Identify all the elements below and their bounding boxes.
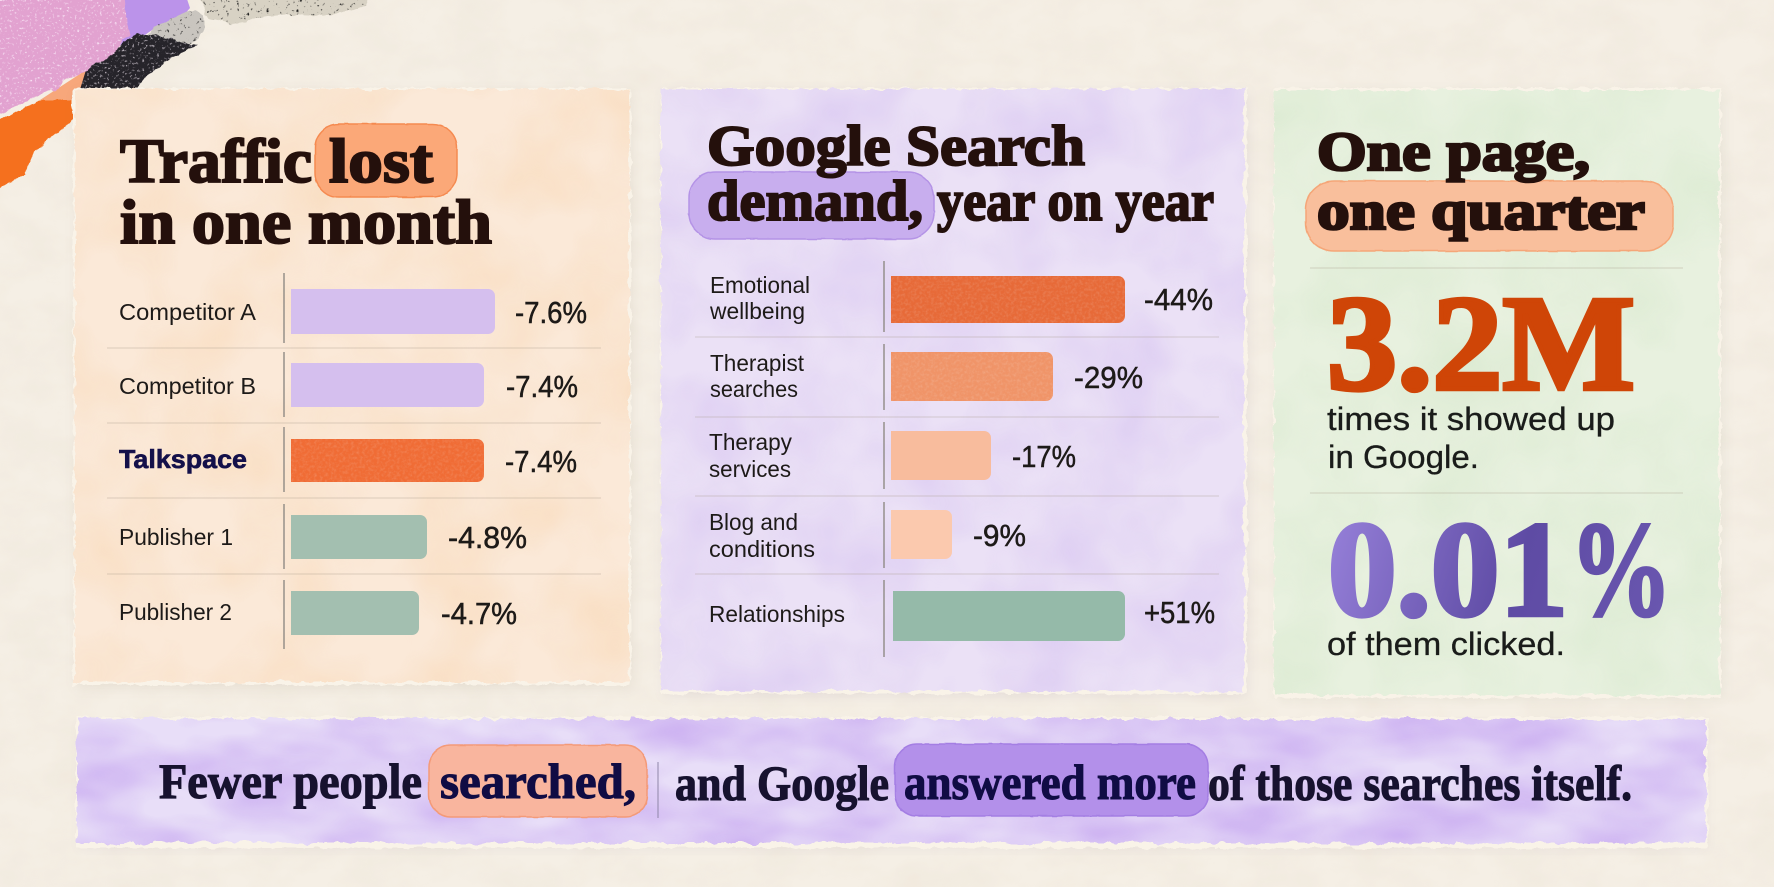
row: Publisher 1: -4.8% (448, 520, 527, 555)
row: Competitor A: Competitor A (119, 299, 257, 325)
heading: Google Search demand: Google Search (707, 115, 1085, 178)
heading: traffic lost (120, 124, 492, 257)
panel: Google Search demand (661, 88, 1248, 696)
row: Relationships: +51% (1144, 595, 1215, 630)
heading: Google Search demand: year on year (937, 170, 1214, 233)
conclusion text: searched, (440, 753, 636, 809)
torn paper collage, top left (0, 0, 372, 194)
stat: 0.01% clicked: 0.01 (1328, 495, 1568, 645)
row: Therapy services (709, 429, 1076, 482)
heading: Google Search demand: demand, (707, 170, 923, 233)
heading: one page, one quarter: One page, (1317, 121, 1590, 182)
heading: traffic lost: lost (329, 128, 433, 196)
row: Publisher 1 (119, 515, 527, 559)
row: Talkspace: Talkspace (119, 444, 247, 474)
row: Emotional wellbeing: wellbeing (709, 298, 805, 324)
row: Publisher 2 (119, 591, 517, 635)
stat: 0.01% clicked (1327, 495, 1672, 662)
conclusion text: answered more (904, 754, 1196, 810)
row: Competitor B (119, 363, 578, 407)
conclusion text (159, 753, 1632, 818)
row: Relationships: Relationships (709, 601, 845, 627)
row: Competitor A: -7.6% (515, 295, 587, 330)
row: Emotional wellbeing: Emotional (710, 272, 810, 298)
row: Therapist searches: Therapist (710, 350, 805, 376)
stat: 0.01% clicked: % (1570, 495, 1672, 645)
bar chart: traffic change by site (107, 273, 601, 649)
heading: traffic lost: in one month (120, 189, 492, 257)
conclusion text: of those searches itself. (1208, 755, 1632, 811)
stat: 0.01% clicked: of them clicked. (1327, 626, 1565, 662)
highlight: searched (429, 745, 647, 817)
row: Relationships (709, 591, 1215, 641)
row: Therapy services: Therapy (709, 429, 792, 455)
panel: one page, one quarter (1274, 88, 1724, 699)
row: Publisher 2: -4.7% (441, 596, 517, 631)
row: Competitor B: Competitor B (119, 373, 256, 399)
stat: 3.2M impressions: in Google. (1328, 439, 1479, 475)
heading: one page, one quarter (1306, 121, 1673, 251)
panel: conclusion strip (76, 717, 1708, 850)
row: Competitor A (119, 289, 587, 334)
row: Competitor B: -7.4% (506, 369, 578, 404)
row: Blog and conditions: -9% (973, 518, 1026, 553)
conclusion text: and Google (675, 755, 889, 811)
row: Blog and conditions (709, 509, 1026, 562)
row: Emotional wellbeing: -44% (1144, 282, 1213, 317)
heading: traffic lost: Traffic (120, 128, 312, 196)
row: Talkspace (119, 439, 577, 482)
row: Talkspace: -7.4% (505, 444, 577, 479)
highlight: answered more (895, 744, 1208, 816)
stat: 3.2M impressions: 3.2M (1327, 269, 1635, 419)
bar chart: search demand by topic (695, 261, 1219, 657)
row: Publisher 1: Publisher 1 (119, 524, 233, 550)
row: Therapy services: services (709, 456, 791, 482)
row: Blog and conditions: Blog and (709, 509, 798, 535)
heading: Google Search demand (689, 115, 1214, 239)
row: Blog and conditions: conditions (709, 536, 815, 562)
row: Therapist searches (710, 350, 1143, 402)
stat: 3.2M impressions: times it showed up (1327, 401, 1615, 437)
panel: traffic lost in one month (73, 88, 632, 688)
row: Emotional wellbeing (709, 272, 1213, 324)
row: Therapist searches: -29% (1074, 360, 1143, 395)
row: Therapist searches: searches (710, 376, 798, 402)
heading: one page, one quarter: one quarter (1317, 180, 1645, 241)
conclusion text: Fewer people (159, 753, 422, 809)
row: Therapy services: -17% (1012, 439, 1076, 474)
row: Publisher 2: Publisher 2 (119, 599, 232, 625)
